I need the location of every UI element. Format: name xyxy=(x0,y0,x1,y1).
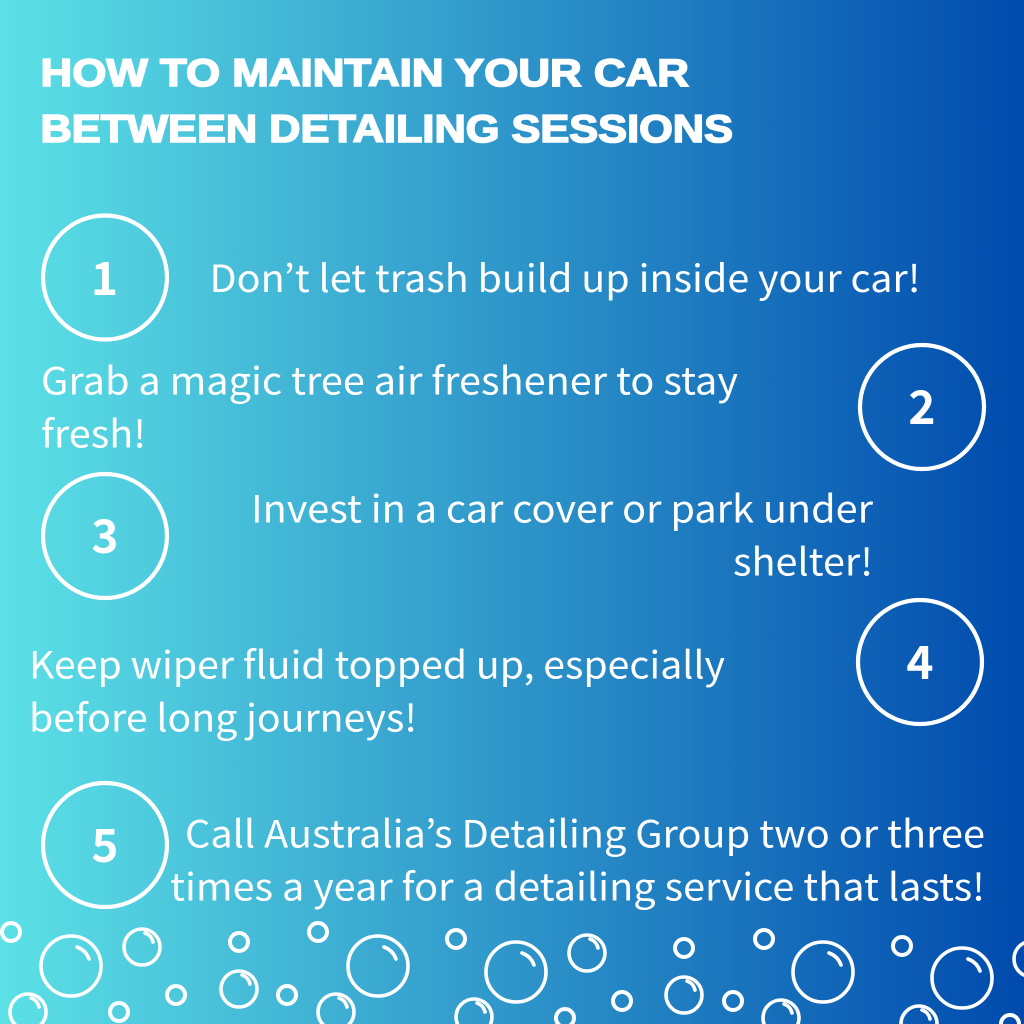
step 4 text xyxy=(29,634,725,742)
title: BETWEEN DETAILING SESSIONS xyxy=(40,108,733,151)
number badge 5 xyxy=(43,783,167,907)
number badge 2 xyxy=(860,345,984,469)
number badge 4: 4 xyxy=(906,627,934,693)
number badge 3: 3 xyxy=(91,501,119,567)
step 3 xyxy=(43,474,873,598)
step 3 text: shelter! xyxy=(733,532,873,586)
number badge 1 xyxy=(43,216,167,340)
step 5 text: times a year for a detailing service that lasts! xyxy=(170,856,985,912)
step 1 text: Don’t let trash build up inside your car! xyxy=(210,248,920,303)
step 4 text: before long journeys! xyxy=(29,688,417,742)
number badge 2: 2 xyxy=(908,372,936,438)
step 5 text xyxy=(170,804,985,912)
number badge 4 xyxy=(858,600,982,724)
title xyxy=(40,52,733,151)
step 5 text: Call Australia’s Detailing Group two or three xyxy=(185,804,985,858)
step 3 text: Invest in a car cover or park under xyxy=(251,478,873,534)
step 4 xyxy=(29,600,982,742)
bubbles decoration xyxy=(2,923,1024,1024)
step 1 xyxy=(43,216,920,340)
number badge 3 xyxy=(43,474,167,598)
step 5 xyxy=(43,783,985,912)
step 2 text xyxy=(41,350,738,458)
step 4 text: Keep wiper fluid topped up, especially xyxy=(29,634,725,690)
step 2 text: Grab a magic tree air freshener to stay xyxy=(41,350,738,406)
step 2 text: fresh! xyxy=(41,404,146,458)
number badge 1: 1 xyxy=(91,243,118,309)
title: HOW TO MAINTAIN YOUR CAR xyxy=(40,52,689,95)
step 2 xyxy=(41,345,984,469)
number badge 5: 5 xyxy=(91,810,119,876)
step 3 text xyxy=(251,478,873,586)
